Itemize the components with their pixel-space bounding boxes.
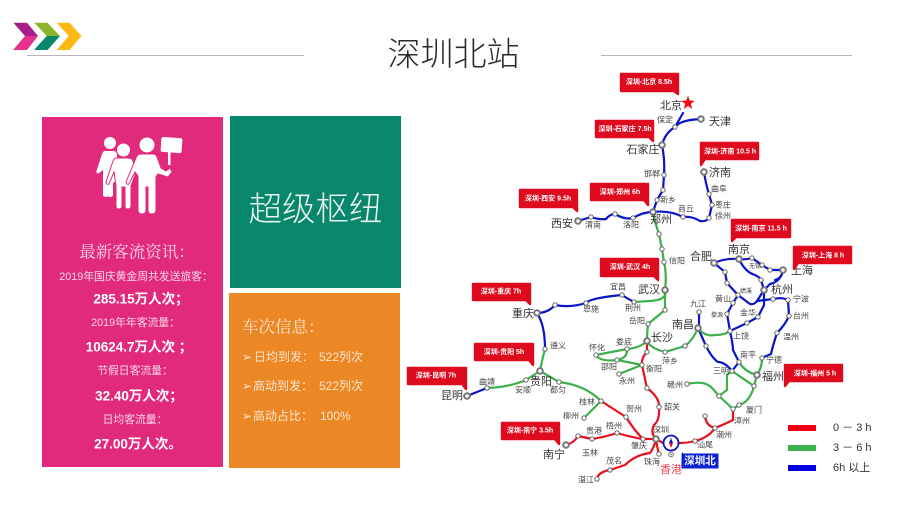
station labels: major cities: 上海 (791, 263, 813, 277)
callout: Jinan (701, 143, 758, 165)
station labels: minor cities: 衡阳 (646, 364, 662, 374)
stations: minor (485, 125, 791, 481)
text block: passenger statistics: 285.15万人次； (93, 290, 189, 308)
station labels: minor cities: 岳阳 (629, 316, 645, 326)
callout: Nanjing: 深圳-南京 11.5 h (735, 224, 787, 232)
panel: super hub: 超级枢纽 (248, 192, 382, 228)
station labels: minor cities: 南平 (740, 350, 756, 360)
callout: Zhengzhou (591, 184, 648, 205)
station labels: minor cities (479, 114, 809, 484)
station labels: minor cities: 珠海 (644, 456, 660, 466)
Hong Kong station: 香港 (660, 463, 682, 476)
station labels: major cities: 昆明 (441, 389, 463, 402)
panel: train information (229, 293, 400, 468)
text block: passenger statistics: 27.00万人次。 (94, 436, 182, 452)
text block: passenger statistics: 2019年国庆黄金周共发送旅客： (59, 269, 213, 283)
callout: Kunming (408, 368, 466, 389)
Hong Kong station (660, 452, 682, 476)
routes: 0 to 3 hours (566, 341, 733, 479)
callout: Kunming: 深圳-昆明 7h (416, 370, 456, 380)
station labels: major cities: 福州 (762, 369, 784, 383)
station labels: major cities: 杭州 (771, 282, 793, 296)
station labels: minor cities: 肇庆 (631, 440, 647, 450)
list: train numbers: ➢ (242, 379, 252, 393)
station labels: major cities: 济南 (709, 165, 731, 179)
text block: passenger statistics: 节假日客流量： (97, 363, 173, 377)
station labels: minor cities: 婺源 (711, 311, 723, 319)
icon: Shenzhen North marker (664, 436, 678, 450)
callout: Shijiazhuang (596, 121, 653, 141)
callout: Xi'an (520, 190, 577, 211)
callout: Nanning (502, 423, 559, 444)
station labels: minor cities: 宁德 (766, 354, 782, 364)
station labels: minor cities: 漳州 (734, 416, 750, 426)
station labels: minor cities: 怀化 (589, 342, 605, 352)
callout: Shijiazhuang: 深圳-石家庄 7.5h (598, 124, 652, 133)
station labels: minor cities: 绩溪 (740, 287, 752, 295)
station labels: major cities: 南宁 (543, 447, 565, 461)
icon: Beijing star (681, 96, 695, 109)
station labels: minor cities: 湛江 (578, 476, 594, 484)
list: train numbers: 522列次 (319, 379, 363, 393)
text block: passenger statistics: 2019年年客流量： (91, 315, 180, 329)
routes: over 6 hours (467, 113, 789, 396)
callout: Shanghai: 深圳-上海 8 h (802, 250, 844, 260)
callout: Guiyang (475, 344, 533, 365)
station labels: minor cities: 深圳 (653, 424, 669, 434)
station labels: minor cities: 邵阳 (601, 362, 617, 372)
station labels: minor cities: 潮州 (716, 430, 732, 440)
heading: train info: 车次信息： (242, 318, 324, 336)
station labels: minor cities: 安顺 (515, 384, 531, 394)
station labels: minor cities: 贵港 (586, 426, 602, 436)
list: train numbers: 高动占比： (253, 408, 313, 423)
callout: Guiyang: 深圳-贵阳 5h (484, 347, 524, 356)
station labels: minor cities: 上饶 (733, 330, 749, 340)
callout: Wuhan: 深圳-武汉 4h (610, 262, 650, 271)
station labels: major cities: 西安 (551, 216, 573, 230)
station labels: minor cities: 厦门 (746, 404, 762, 414)
panel: passenger flow (42, 117, 223, 467)
list: train numbers: 522列次 (319, 350, 363, 364)
station labels: major cities: 石家庄 (626, 142, 660, 156)
station labels: major cities: 南昌 (672, 318, 694, 331)
list: train numbers (242, 349, 363, 423)
station labels: minor cities: 桂林 (579, 396, 595, 406)
callout: Xi'an: 深圳-西安 9.5h (525, 194, 571, 202)
heading: latest passenger flow: 最新客流资讯： (79, 242, 195, 262)
station labels: minor cities: 贺州 (626, 404, 642, 414)
station labels: minor cities: 柳州 (563, 410, 579, 420)
station labels: minor cities: 温州 (783, 332, 799, 342)
station labels: minor cities: 宜昌 (610, 282, 626, 292)
callout: Beijing: 深圳-北京 8.5h (626, 77, 672, 86)
station labels: minor cities: 洛阳 (623, 220, 639, 230)
station labels: major cities: 贵阳 (530, 375, 552, 388)
list: train numbers: ➢ (242, 409, 252, 423)
station labels: minor cities: 恩施 (583, 304, 599, 314)
station labels: minor cities: 九江 (690, 300, 706, 308)
station labels: major cities (441, 98, 813, 461)
station labels: minor cities: 金华 (740, 308, 756, 318)
legend: 3 － 6 h (833, 442, 872, 454)
text block: passenger statistics: 32.40万人次； (95, 388, 183, 404)
callout: Fuzhou (785, 365, 842, 386)
callout: Jinan: 深圳-济南 10.5 h (704, 146, 756, 156)
station labels: minor cities: 信阳 (669, 256, 685, 266)
callout: Shanghai (794, 247, 851, 269)
railway map (408, 74, 851, 484)
legend: 0 － 3 h (833, 422, 872, 434)
station labels: minor cities: 赣州 (667, 380, 683, 390)
routes: 3 to 6 hours (487, 212, 762, 418)
station labels: minor cities: 枣庄 (715, 200, 731, 210)
station labels: minor cities: 永州 (619, 376, 635, 386)
station labels: minor cities: 黄山 (715, 294, 731, 304)
legend (788, 422, 872, 474)
list: train numbers: 日均到发： (254, 349, 314, 364)
station labels: minor cities: 萍乡 (662, 356, 678, 366)
station labels: minor cities: 宁波 (793, 294, 809, 304)
station labels: minor cities: 商丘 (678, 204, 694, 214)
callout: Nanning: 深圳-南宁 3.5h (507, 426, 553, 434)
text block: passenger statistics: 日均客流量： (103, 412, 167, 426)
list: train numbers: 100% (320, 409, 351, 423)
station labels: major cities: 长沙 (651, 331, 673, 344)
station labels: minor cities: 新乡 (660, 194, 676, 204)
text block: passenger statistics (59, 269, 213, 452)
station labels: major cities: 武汉 (638, 283, 660, 296)
callout: Zhengzhou: 深圳-郑州 6h (600, 187, 640, 196)
station labels: major cities: 北京 (660, 98, 682, 112)
station labels: minor cities: 邯郸 (644, 168, 660, 178)
station labels: minor cities: 三明 (713, 366, 729, 376)
station labels: minor cities: 曲阜 (711, 184, 727, 194)
panel: super hub (230, 116, 401, 288)
callout: Chongqing: 深圳-重庆 7h (481, 286, 521, 296)
logo: three chevrons (13, 23, 82, 50)
station labels: minor cities: 梧州 (606, 420, 622, 430)
station labels: major cities: 南京 (728, 242, 750, 256)
station labels: minor cities: 曲靖 (479, 376, 495, 386)
station labels: minor cities: 台州 (793, 310, 809, 320)
station labels: minor cities: 荆州 (625, 302, 641, 312)
callout: Beijing (621, 74, 678, 94)
icon: people with sign (96, 137, 182, 214)
station labels: major cities: 天津 (709, 115, 731, 128)
station labels: minor cities: 茂名 (606, 456, 622, 466)
station labels: minor cities: 无锡 (749, 262, 761, 270)
station labels: minor cities: 娄底 (616, 336, 632, 346)
stations: major (464, 116, 786, 448)
station labels: major cities: 重庆 (512, 306, 534, 320)
badge: Shenzhen North: 深圳北 (684, 455, 716, 467)
legend: 6h 以上 (833, 461, 870, 474)
callout: Chongqing (473, 284, 530, 304)
station labels: minor cities: 玉林 (582, 448, 598, 458)
station labels: minor cities: 遵义 (550, 340, 566, 350)
station labels: minor cities: 汕尾 (697, 440, 713, 450)
station labels: minor cities: 保定 (657, 114, 673, 124)
badge: Shenzhen North (682, 452, 718, 468)
list: train numbers: ➢ (242, 350, 252, 364)
title: 深圳北站 (388, 36, 520, 72)
callout: Fuzhou: 深圳-福州 5 h (794, 368, 836, 378)
station labels: minor cities: 渭南 (585, 220, 601, 230)
station labels: major cities: 合肥 (690, 249, 712, 263)
callout: Nanjing (732, 220, 790, 241)
station labels: minor cities: 韶关 (664, 402, 680, 412)
station labels: minor cities: 徐州 (715, 210, 731, 220)
station labels: major cities: 郑州 (650, 212, 672, 226)
callout: Wuhan (601, 259, 658, 280)
text block: passenger statistics: 10624.7万人次 ； (86, 338, 192, 356)
station labels: minor cities: 都匀 (550, 384, 566, 394)
list: train numbers: 高动到发： (253, 378, 313, 393)
